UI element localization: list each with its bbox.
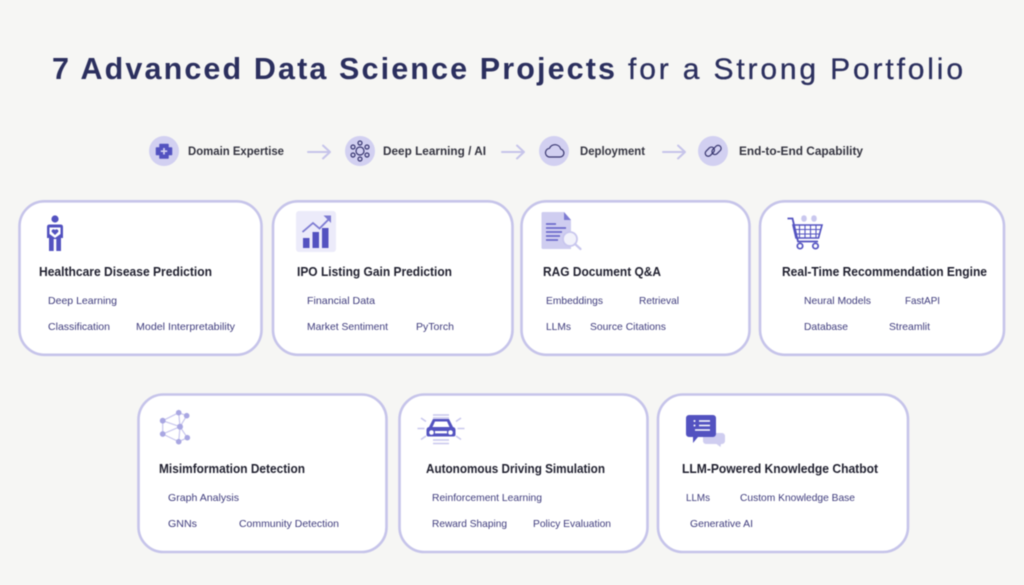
panel: Misimformation Detection: [138, 394, 386, 552]
step: End-to-End Capability: End-to-End Capability: [739, 146, 864, 158]
icon: document with magnifier: [542, 212, 580, 249]
heading: Autonomous Driving Simulation: [426, 462, 605, 476]
tags: LLMs: [546, 321, 571, 333]
tags: Graph Analysis: [168, 492, 239, 504]
flow: skill progression: [149, 136, 864, 166]
tags: FastAPI: [905, 295, 940, 307]
tags: Financial Data: [307, 295, 375, 307]
tags: Streamlit: [889, 321, 930, 333]
tags: Market Sentiment: [307, 321, 388, 333]
tags: Classification: [48, 321, 110, 333]
panel: IPO Listing Gain Prediction: [273, 201, 512, 355]
step: Deployment: [539, 136, 645, 166]
tags: Source Citations: [590, 321, 666, 333]
heading: Misimformation Detection: [159, 462, 305, 476]
tags: Neural Models: [804, 295, 871, 307]
icon: person with heart: [47, 215, 63, 251]
icon: chat bubbles: [686, 415, 725, 447]
step: End-to-End Capability: [698, 136, 864, 166]
tags: Reinforcement Learning: [432, 492, 542, 504]
tags: Policy Evaluation: [533, 518, 611, 530]
tags: Deep Learning: [48, 295, 117, 307]
heading: LLM-Powered Knowledge Chatbot: [682, 462, 879, 476]
title: for a Strong Portfolio: [628, 53, 963, 86]
step: Deep Learning / AI: Deep Learning / AI: [383, 146, 486, 158]
tags: Custom Knowledge Base: [740, 492, 855, 504]
tags: Community Detection: [239, 518, 339, 530]
arrow: [502, 146, 524, 158]
tags: PyTorch: [416, 321, 454, 333]
tags: [168, 492, 339, 530]
tags: [432, 492, 611, 530]
tags: Generative AI: [690, 518, 753, 530]
heading: IPO Listing Gain Prediction: [297, 265, 452, 279]
step: Domain Expertise: [149, 136, 284, 166]
panel: Autonomous Driving Simulation: [400, 394, 648, 552]
tags: [686, 492, 855, 530]
tags: GNNs: [168, 518, 197, 530]
tags: [48, 295, 236, 333]
panel: Healthcare Disease Prediction: [20, 201, 262, 355]
title: [52, 52, 963, 86]
tags: Model Interpretability: [136, 321, 236, 333]
icon: network graph: [160, 410, 190, 445]
arrow: [663, 146, 685, 158]
tags: Retrieval: [639, 295, 679, 307]
panel: RAG Document Q&A: [522, 201, 750, 355]
panel: LLM-Powered Knowledge Chatbot: [658, 394, 908, 552]
heading: Real-Time Recommendation Engine: [782, 265, 987, 279]
tags: [546, 295, 679, 333]
panel: Real-Time Recommendation Engine: [760, 201, 1004, 355]
icon: shopping cart: [788, 215, 822, 249]
tags: LLMs: [686, 492, 710, 504]
tags: [307, 295, 454, 333]
heading: Healthcare Disease Prediction: [39, 265, 212, 279]
step: Deployment: Deployment: [580, 146, 645, 158]
tags: Reward Shaping: [432, 518, 507, 530]
arrow: [308, 146, 330, 158]
icon: autonomous car: [418, 415, 464, 444]
title: 7 Advanced Data Science Projects: [52, 52, 615, 86]
icon: rising bar chart: [296, 211, 336, 252]
step: Domain Expertise: Domain Expertise: [188, 146, 284, 158]
step: Deep Learning / AI: [345, 136, 486, 166]
tags: Embeddings: [546, 295, 603, 307]
heading: RAG Document Q&A: [543, 265, 661, 279]
tags: Database: [804, 321, 848, 333]
tags: [804, 295, 940, 333]
